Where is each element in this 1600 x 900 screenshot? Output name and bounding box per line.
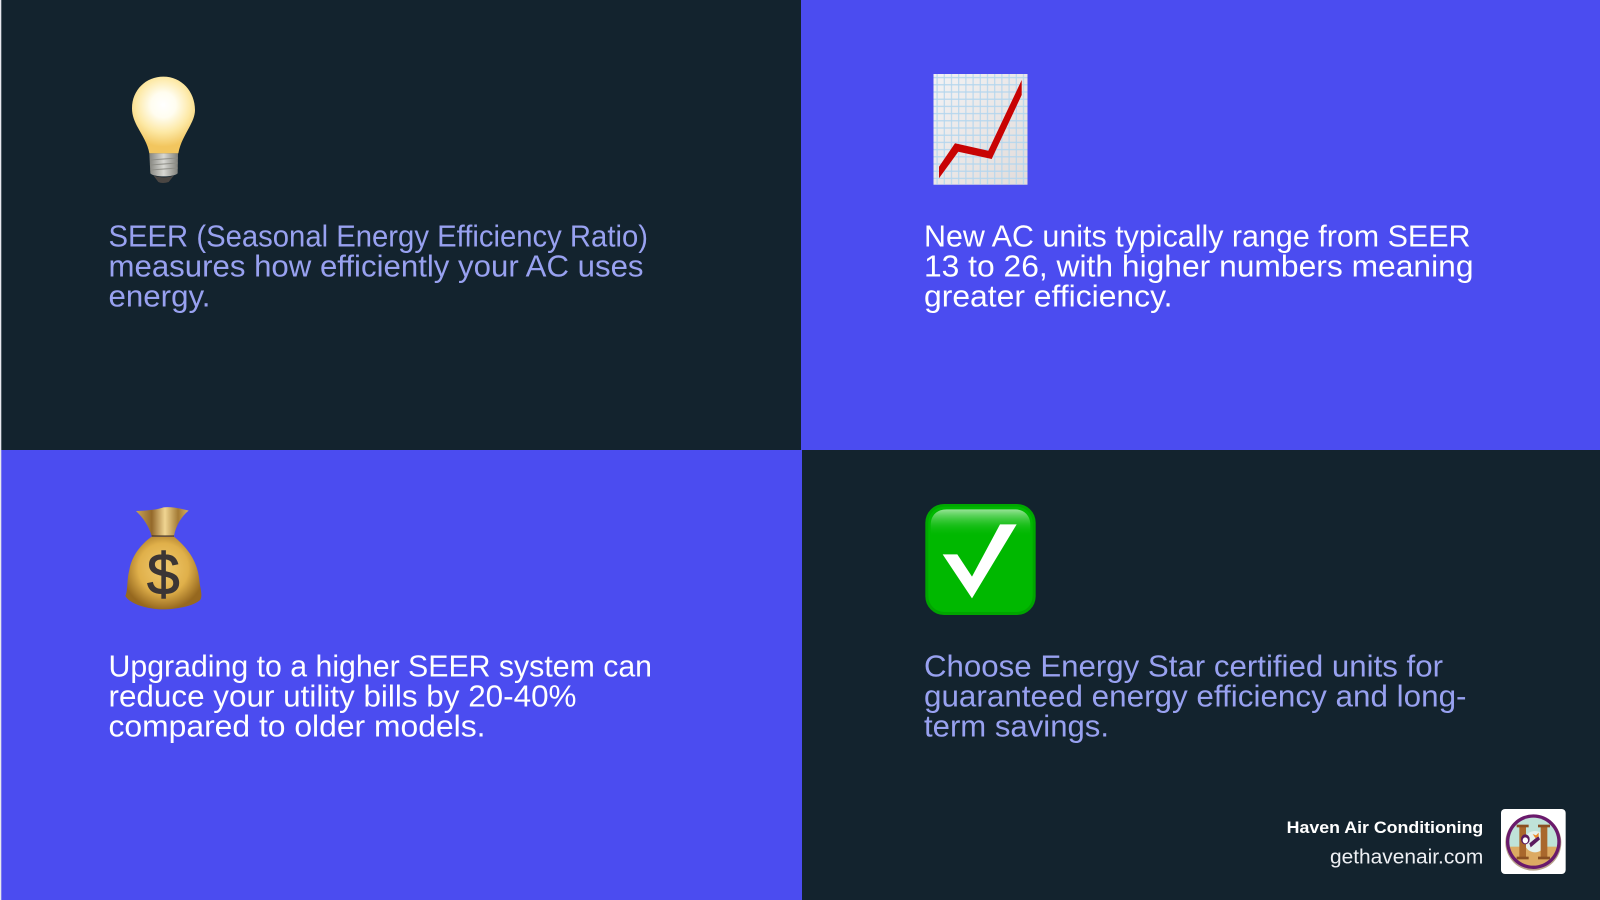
text: savings: compared to older models. (108, 709, 486, 744)
panel: Energy Star advice (802, 450, 1600, 900)
text: SEER definition (108, 219, 648, 314)
brand: company name and website: gethavenair.com (1330, 846, 1483, 868)
brand: company name and website (1287, 818, 1483, 868)
panel: savings (1, 450, 802, 900)
text: Energy Star advice: guaranteed energy efficiency and long- (924, 679, 1466, 714)
text: savings: reduce your utility bills by 20-40% (108, 679, 576, 714)
icon: green check mark (925, 504, 1036, 615)
text: SEER range: greater efficiency. (924, 279, 1172, 314)
text: SEER definition: energy. (108, 279, 210, 314)
text: savings (108, 649, 652, 744)
text: Energy Star advice (924, 649, 1466, 744)
text: SEER range (924, 219, 1474, 314)
text: SEER range: 13 to 26, with higher numbers meaning (924, 249, 1474, 284)
brand: company name and website: Haven Air Conditioning (1287, 818, 1483, 837)
text: SEER definition: SEER (Seasonal Energy Efficiency Ratio) (108, 219, 648, 254)
logo: Haven Air Conditioning badge (1501, 809, 1566, 874)
text: savings: Upgrading to a higher SEER system can (108, 649, 652, 684)
text: Energy Star advice: term savings. (924, 709, 1109, 744)
icon: rising chart (934, 74, 1028, 185)
text: SEER definition: measures how efficiently your AC uses (108, 249, 644, 284)
icon: money bag: $ (147, 542, 180, 607)
text: Energy Star advice: Choose Energy Star certified units for (924, 649, 1443, 684)
panel: what SEER is (1, 0, 801, 450)
text: SEER range: New AC units typically range from SEER (924, 219, 1470, 254)
panel: SEER range (801, 0, 1600, 450)
icon: light bulb (132, 77, 195, 183)
icon: money bag (125, 507, 201, 609)
